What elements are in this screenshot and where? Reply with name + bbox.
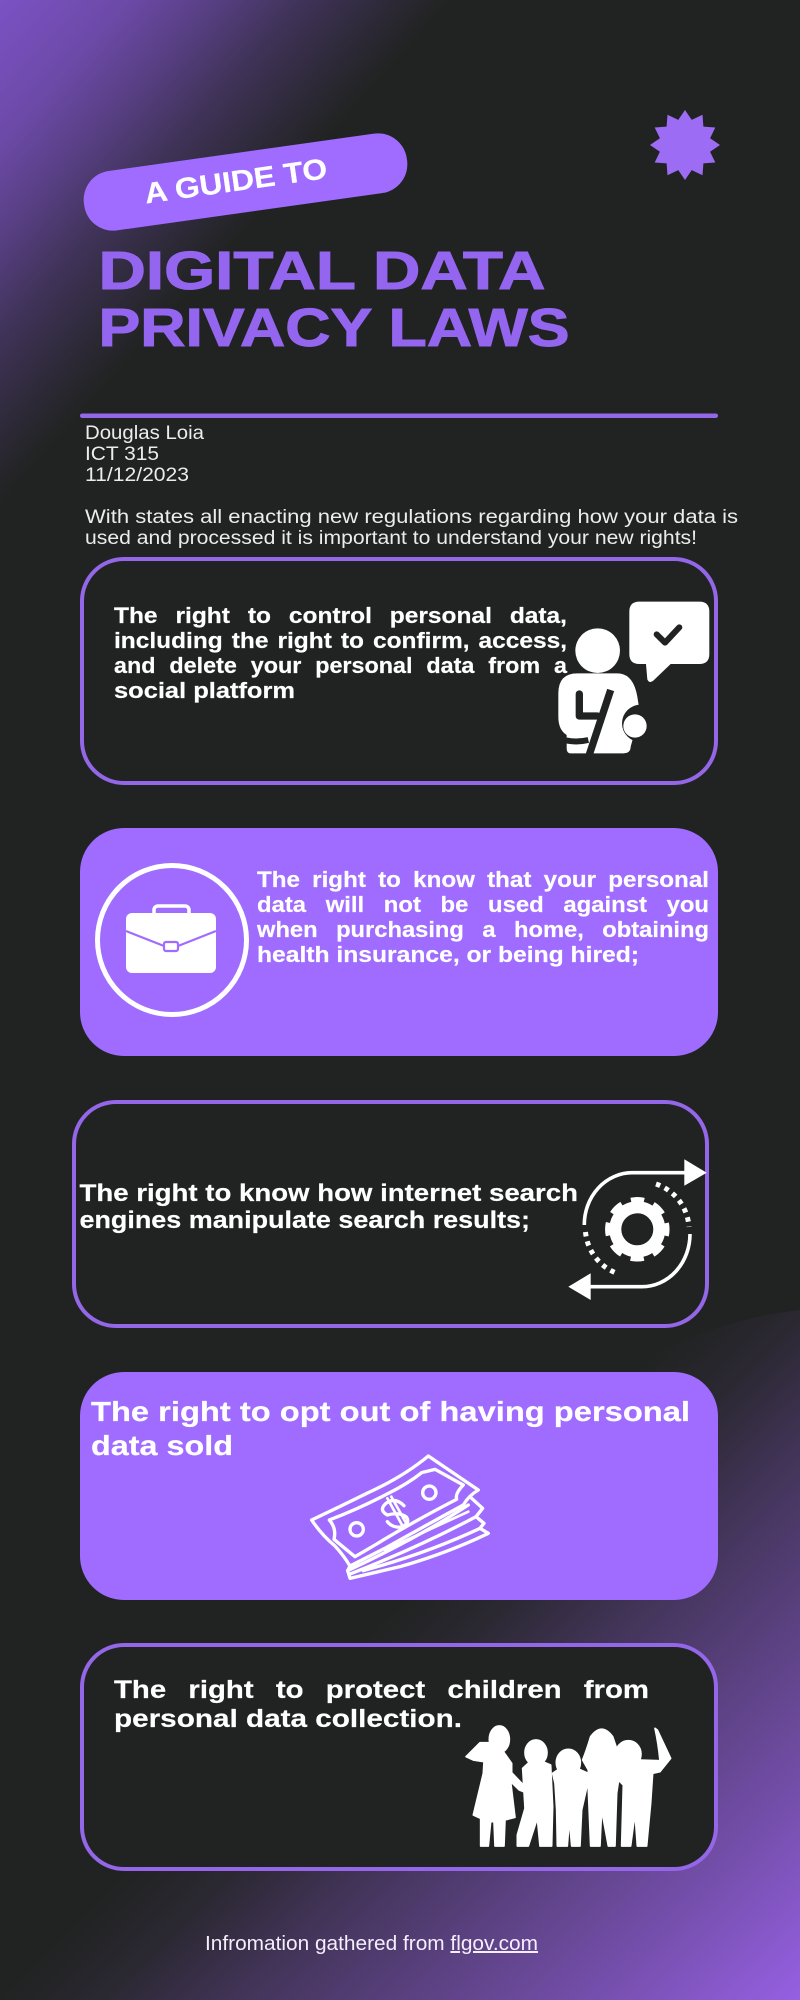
icon: briefcase in circle — [98, 866, 246, 1014]
title — [98, 241, 570, 358]
panel text: data will not be used against you — [257, 892, 709, 917]
intro text — [85, 507, 738, 549]
title: DIGITAL DATA — [98, 241, 546, 301]
panel: right to protect children — [82, 1645, 716, 1869]
panel text: The right to protect children from — [114, 1676, 649, 1704]
panel text: The right to know how internet search — [80, 1180, 578, 1207]
footer source note: Infromation gathered from flgov.com — [205, 1933, 538, 1955]
panel text: including the right to confirm, access, — [114, 628, 567, 653]
badge: a guide to: A GUIDE TO — [143, 153, 329, 210]
author details: 11/12/2023 — [85, 465, 189, 486]
panel text — [114, 603, 568, 703]
panel: right to opt out of having data sold — [80, 1372, 718, 1600]
author details: Douglas Loia — [85, 423, 204, 444]
panel text — [256, 867, 709, 967]
icon: children silhouettes — [466, 1726, 671, 1846]
icon: starburst — [650, 110, 720, 180]
intro text: With states all enacting new regulations regarding how your data is — [85, 507, 738, 528]
panel: right to control personal data — [82, 559, 716, 783]
panel text: personal data collection. — [114, 1705, 462, 1733]
title: PRIVACY LAWS — [98, 298, 570, 358]
icon: stack of money — [312, 1456, 488, 1578]
panel text: social platform — [114, 678, 295, 703]
author details: ICT 315 — [85, 444, 159, 465]
panel text: The right to control personal data, — [114, 603, 567, 628]
icon: person with speech bubble — [557, 602, 709, 757]
panel text — [91, 1396, 690, 1461]
badge: a guide to — [80, 130, 411, 234]
panel text: health insurance, or being hired; — [257, 942, 639, 967]
panel text: when purchasing a home, obtaining — [256, 917, 709, 942]
panel text: and delete your personal data from a — [114, 653, 568, 678]
panel: right to know data will not be used against you — [80, 828, 718, 1056]
panel: right to know how search engines manipulate results — [74, 1102, 707, 1326]
panel text — [114, 1676, 649, 1733]
intro text: used and processed it is important to understand your new rights! — [85, 528, 697, 549]
panel text: engines manipulate search results; — [80, 1207, 530, 1234]
panel text — [80, 1180, 578, 1234]
panel text: data sold — [91, 1430, 233, 1461]
panel text: The right to opt out of having personal — [91, 1396, 690, 1427]
icon: gear with cycle arrows — [568, 1159, 707, 1300]
author details — [85, 423, 204, 486]
panel text: The right to know that your personal — [257, 867, 709, 892]
